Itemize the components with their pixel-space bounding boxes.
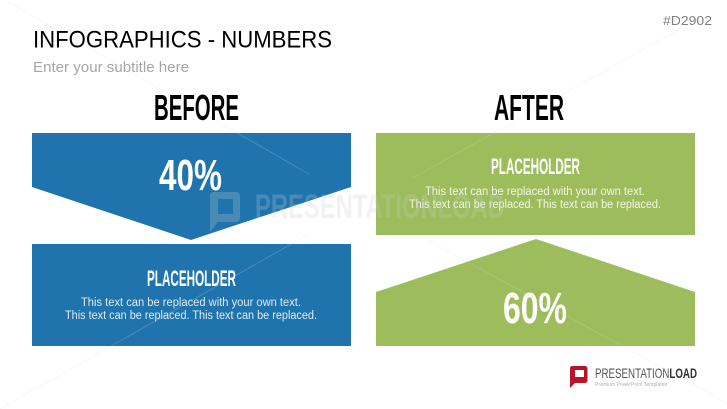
watermark xyxy=(210,188,505,232)
panel: before text box: This text can be replaced. This text can be replaced. xyxy=(65,310,317,322)
heading: before: BEFORE xyxy=(154,87,239,128)
logo: PresentationLoad xyxy=(570,365,697,388)
panel: after percentage arrow: 60% xyxy=(503,284,567,333)
panel: before percentage arrow: 40% xyxy=(159,151,222,200)
panel: after text box: PLACEHOLDER xyxy=(491,154,580,179)
title: INFOGRAPHICS - NUMBERS xyxy=(33,26,332,54)
panel: before percentage arrow xyxy=(32,133,351,240)
panel: before text box: PLACEHOLDER xyxy=(147,266,236,291)
panel: after percentage arrow xyxy=(376,239,695,346)
panel: after text box: This text can be replaced. This text can be replaced. xyxy=(409,199,661,211)
panel: after text box xyxy=(376,133,695,235)
icon: red speech bubble xyxy=(570,366,588,388)
subtitle: Enter your subtitle here xyxy=(33,59,189,76)
logo tagline: Premium PowerPoint Templates xyxy=(595,382,667,388)
panel: before text box xyxy=(32,244,351,346)
logo wordmark: PRESENTATIONLOAD xyxy=(595,365,697,381)
reference code: #D2902 xyxy=(663,13,712,28)
heading: after: AFTER xyxy=(494,87,564,128)
panel: after text box: This text can be replaced with your own text. xyxy=(425,186,645,198)
panel: before text box: This text can be replaced with your own text. xyxy=(81,297,301,309)
watermark: PRESENTATIONLOAD xyxy=(255,188,505,226)
